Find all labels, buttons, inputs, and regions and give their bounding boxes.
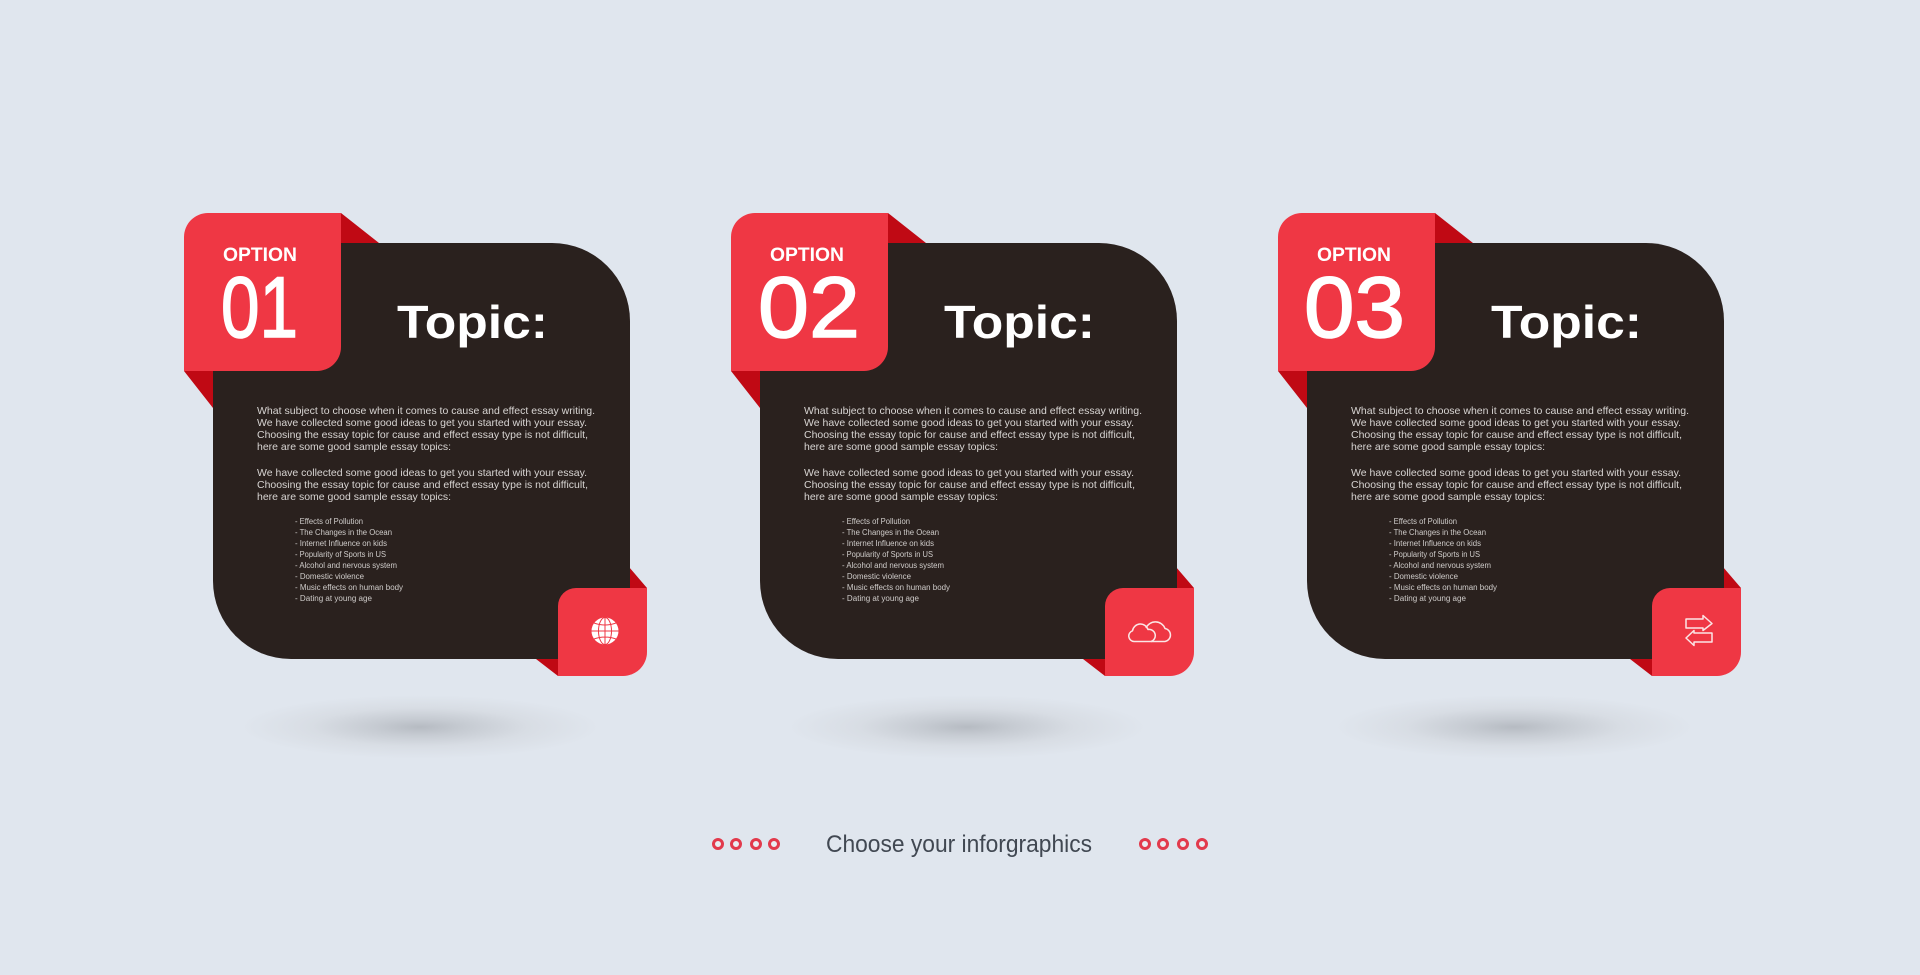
body text: here are some good sample essay topics: [1351, 441, 1545, 453]
topic list: - Alcohol and nervous system [1389, 561, 1491, 570]
body text: What subject to choose when it comes to cause and effect essay writing. [1351, 405, 1689, 417]
fold: top and left of number tab [1278, 213, 1473, 408]
body text: Choosing the essay topic for cause and effect essay type is not difficult, [257, 429, 588, 441]
topic list: - Popularity of Sports in US [1389, 550, 1480, 559]
shadow: option 03 [1334, 695, 1694, 759]
body text: We have collected some good ideas to get you started with your essay. [1351, 417, 1681, 429]
heading: topic: Topic: [944, 296, 1095, 348]
body text: What subject to choose when it comes to cause and effect essay writing. [257, 405, 595, 417]
number tab [731, 213, 888, 371]
body text: Choosing the essay topic for cause and effect essay type is not difficult, [257, 479, 588, 491]
number tab [1278, 213, 1435, 371]
body text: What subject to choose when it comes to cause and effect essay writing. [804, 405, 1142, 417]
body text: Choosing the essay topic for cause and effect essay type is not difficult, [1351, 429, 1682, 441]
topic list: - Dating at young age [842, 594, 920, 603]
body text: Choosing the essay topic for cause and effect essay type is not difficult, [804, 479, 1135, 491]
label: option: OPTION [770, 245, 844, 266]
topic list: - The Changes in the Ocean [842, 528, 939, 537]
topic list: - Internet Influence on kids [295, 539, 387, 548]
topic list: - Effects of Pollution [1389, 517, 1457, 526]
body text: We have collected some good ideas to get you started with your essay. [257, 417, 587, 429]
body text: We have collected some good ideas to get you started with your essay. [804, 467, 1134, 479]
topic list [295, 517, 403, 603]
heading: topic: Topic: [397, 296, 548, 348]
body text: We have collected some good ideas to get you started with your essay. [257, 467, 587, 479]
icon tab [1652, 588, 1741, 676]
fold: top and left of number tab [184, 213, 379, 408]
topic list: - The Changes in the Ocean [1389, 528, 1486, 537]
fold: small tab corners [1630, 567, 1741, 676]
body text [257, 405, 595, 503]
topic list: - Music effects on human body [1389, 583, 1497, 592]
heading: topic: Topic: [1491, 296, 1642, 348]
dark card [213, 243, 630, 659]
shadow: option 02 [787, 695, 1147, 759]
panel: option 02 [731, 213, 1194, 759]
dark card [1307, 243, 1724, 659]
footer [714, 831, 1206, 858]
topic list: - Alcohol and nervous system [842, 561, 944, 570]
topic list: - Music effects on human body [842, 583, 950, 592]
label: option: OPTION [1317, 245, 1391, 266]
topic list: - Domestic violence [295, 572, 365, 581]
fold: top and left of number tab [731, 213, 926, 408]
icon: globe [592, 618, 618, 644]
body text: here are some good sample essay topics: [804, 491, 998, 503]
icon tab [558, 588, 647, 676]
icon tab [1105, 588, 1194, 676]
icon: cloud [1129, 622, 1170, 642]
body text [804, 405, 1142, 503]
body text: We have collected some good ideas to get you started with your essay. [804, 417, 1134, 429]
topic list: - Internet Influence on kids [1389, 539, 1481, 548]
topic list: - The Changes in the Ocean [295, 528, 392, 537]
number tab [184, 213, 341, 371]
topic list: - Music effects on human body [295, 583, 403, 592]
number: 01: 01 [221, 260, 298, 356]
icon: exchange arrows [1686, 616, 1712, 646]
topic list: - Effects of Pollution [295, 517, 363, 526]
body text: We have collected some good ideas to get you started with your essay. [1351, 467, 1681, 479]
topic list [1389, 517, 1497, 603]
dark card [760, 243, 1177, 659]
topic list: - Effects of Pollution [842, 517, 910, 526]
topic list: - Domestic violence [842, 572, 912, 581]
body text [1351, 405, 1689, 503]
topic list: - Dating at young age [1389, 594, 1467, 603]
body text: Choosing the essay topic for cause and effect essay type is not difficult, [804, 429, 1135, 441]
topic list: - Dating at young age [295, 594, 373, 603]
dots: right [1140, 840, 1206, 848]
panel: option 03 [1278, 213, 1741, 759]
label: option: OPTION [223, 245, 297, 266]
number: 03: 03 [1304, 260, 1405, 356]
number: 02: 02 [758, 260, 860, 356]
topic list: - Internet Influence on kids [842, 539, 934, 548]
fold: small tab corners [536, 567, 647, 676]
body text: here are some good sample essay topics: [257, 491, 451, 503]
fold: small tab corners [1083, 567, 1194, 676]
dots: left [714, 840, 778, 848]
topic list: - Alcohol and nervous system [295, 561, 397, 570]
topic list: - Domestic violence [1389, 572, 1459, 581]
footer caption: Choose your inforgraphics [826, 831, 1092, 858]
body text: here are some good sample essay topics: [257, 441, 451, 453]
topic list: - Popularity of Sports in US [842, 550, 933, 559]
body text: here are some good sample essay topics: [804, 441, 998, 453]
shadow: option 01 [240, 695, 600, 759]
panel: option 01 [184, 213, 647, 759]
topic list [842, 517, 950, 603]
body text: Choosing the essay topic for cause and effect essay type is not difficult, [1351, 479, 1682, 491]
topic list: - Popularity of Sports in US [295, 550, 386, 559]
body text: here are some good sample essay topics: [1351, 491, 1545, 503]
